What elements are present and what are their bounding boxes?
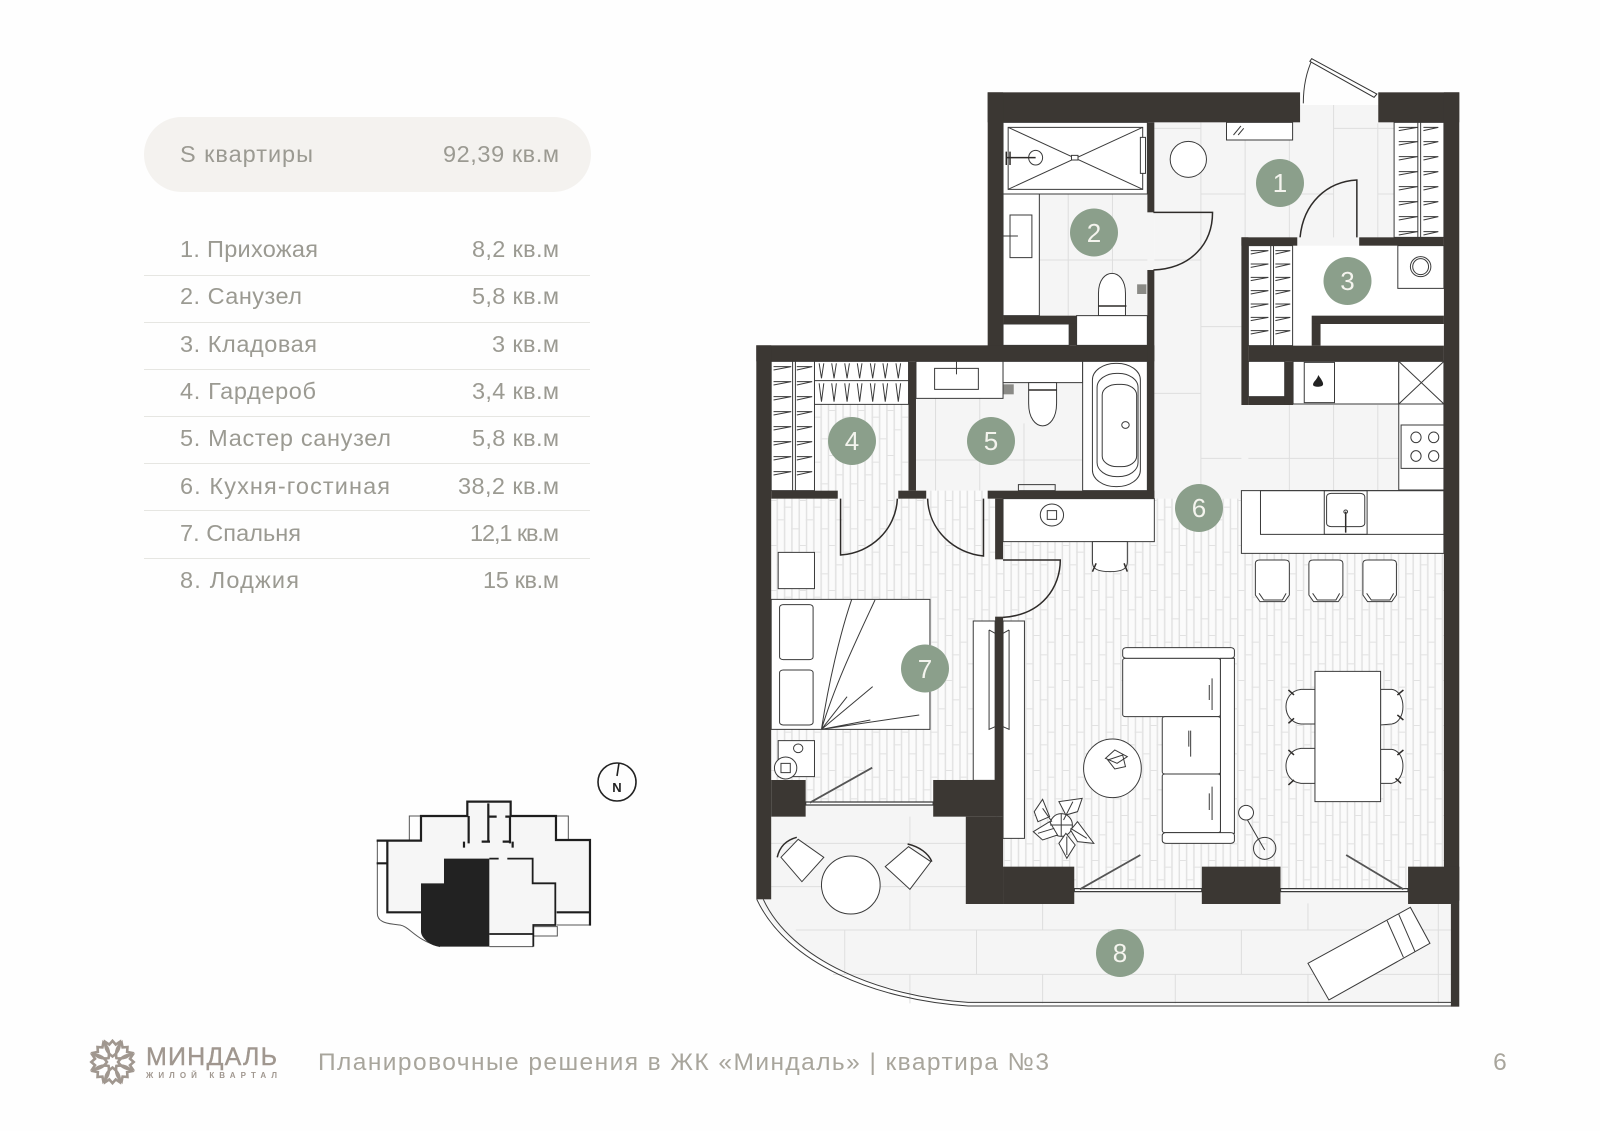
marker 2	[1070, 208, 1118, 256]
room list: 38,2 кв.м	[458, 473, 559, 499]
total area pill: 92,39 кв.м	[443, 141, 559, 167]
room list: 3 кв.м	[492, 331, 559, 357]
key plan of the floor	[377, 802, 590, 947]
panel: area table	[144, 117, 591, 593]
plant	[1033, 798, 1094, 858]
bedroom furniture	[771, 552, 930, 779]
room list: 3. Кладовая	[180, 331, 317, 357]
marker 8: 8	[1113, 938, 1127, 968]
loggia furniture	[777, 837, 1430, 1000]
room list: 2. Санузел	[180, 283, 302, 309]
total area pill: S квартиры	[180, 141, 313, 167]
master bathroom fixtures	[916, 361, 1147, 491]
room list: 4. Гардероб	[180, 378, 316, 404]
marker 4	[828, 417, 876, 465]
dining set	[1286, 671, 1403, 802]
floor plan	[756, 59, 1459, 1007]
desk	[1003, 499, 1154, 542]
total area pill	[144, 117, 591, 192]
furniture in bedroom, living room and loggia	[757, 542, 1452, 1006]
kitchen units	[1241, 361, 1444, 553]
room list: 6. Кухня-гостиная	[180, 473, 390, 499]
hallway furniture	[1170, 122, 1444, 237]
room list	[144, 236, 590, 593]
wordmark: МИНДАЛЬ	[146, 1043, 277, 1071]
page number: 6	[1493, 1049, 1507, 1076]
compass	[598, 763, 636, 801]
marker 5: 5	[984, 426, 998, 456]
room list: 3,4 кв.м	[472, 378, 559, 404]
room list: 5. Мастер санузел	[180, 425, 391, 451]
desk chair	[1092, 542, 1127, 572]
marker 4: 4	[845, 426, 859, 456]
icon: flower mark	[91, 1041, 134, 1083]
sofa	[1123, 648, 1234, 843]
compass: N	[612, 780, 622, 795]
room list: 8. Лоджия	[180, 567, 299, 593]
marker 3: 3	[1340, 266, 1355, 296]
logo	[91, 1041, 277, 1083]
marker 7: 7	[918, 654, 932, 684]
room list: 15 кв.м	[483, 567, 559, 593]
loggia rail	[757, 899, 1452, 1006]
room list: 7. Спальня	[180, 520, 301, 546]
floor lamp	[1239, 805, 1276, 859]
floors	[759, 105, 1451, 1003]
wardrobe fixtures	[771, 361, 909, 491]
room list: 8,2 кв.м	[472, 236, 559, 262]
room list: 5,8 кв.м	[472, 283, 559, 309]
logo tagline: ЖИЛОЙ КВАРТАЛ	[145, 1071, 277, 1080]
marker 2: 2	[1087, 218, 1101, 248]
marker 8	[1096, 929, 1144, 977]
coffee table	[1084, 739, 1141, 798]
marker 1	[1256, 159, 1304, 207]
doors	[841, 59, 1377, 617]
room list: 12,1 кв.м	[470, 520, 559, 546]
windows and balcony doors	[806, 768, 1408, 892]
walls	[756, 92, 1459, 1007]
marker 6: 6	[1192, 493, 1206, 523]
room list: 5,8 кв.м	[472, 425, 559, 451]
bar stools	[1255, 560, 1396, 602]
marker 6	[1175, 484, 1223, 532]
TV unit	[973, 621, 1024, 838]
storage room fixtures	[1248, 246, 1444, 346]
marker 1: 1	[1273, 168, 1287, 198]
room list: 1. Прихожая	[180, 236, 318, 262]
room number markers	[828, 159, 1372, 977]
marker 7	[901, 644, 949, 692]
footer caption: Планировочные решения в ЖК «Миндаль» | квартира №3	[318, 1049, 1049, 1076]
bathroom 2 fixtures	[1003, 122, 1147, 345]
marker 3	[1324, 257, 1372, 305]
marker 5	[967, 417, 1015, 465]
